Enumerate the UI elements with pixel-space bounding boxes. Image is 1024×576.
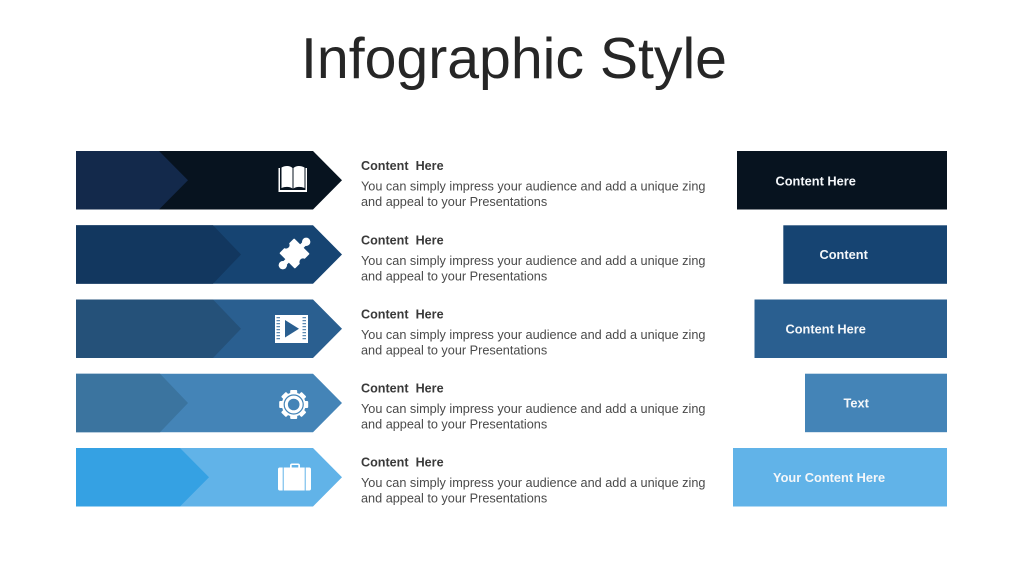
icon: gear [279,390,308,419]
text block 4: and appeal to your Presentations [361,418,547,432]
text block 4 [361,382,705,432]
text block 2 [361,233,705,283]
bar 5 [733,448,947,506]
bar 5: Your Content Here [773,470,885,485]
arrow row 2 [76,225,342,284]
text block 1: You can simply impress your audience and add a unique zing [361,180,705,194]
icon: film strip with play [275,315,308,343]
bar 4: Text [844,396,870,410]
bar 3 [754,300,947,358]
bar 1 [737,151,947,210]
text block 3: You can simply impress your audience and add a unique zing [361,328,705,342]
bar 3: Content Here [786,322,866,336]
text block 1: Content Here [361,159,444,173]
text block 4: Content Here [361,382,444,396]
text block 5: and appeal to your Presentations [361,492,547,506]
text block 5 [361,456,705,506]
text block 5: Content Here [361,456,444,470]
text block 4: You can simply impress your audience and add a unique zing [361,402,705,416]
bar 1: Content Here [776,174,856,188]
arrow row 4 [76,374,342,432]
arrow row 1 [76,151,342,210]
arrow row 5 [76,448,342,506]
bar 2: Content [820,247,869,262]
title: Infographic Style [301,27,727,91]
icon: puzzle piece [269,228,320,279]
bar 2 [783,225,947,284]
text block 3 [361,307,705,357]
text block 1 [361,159,705,209]
text block 5: You can simply impress your audience and add a unique zing [361,476,705,490]
text block 1: and appeal to your Presentations [361,195,547,209]
text block 3: and appeal to your Presentations [361,343,547,357]
arrow row 3 [76,300,342,358]
text block 2: You can simply impress your audience and add a unique zing [361,254,705,268]
text block 2: and appeal to your Presentations [361,269,547,283]
icon: briefcase [278,464,311,490]
text block 2: Content Here [361,233,444,247]
bar 4 [805,374,947,432]
text block 3: Content Here [361,307,444,321]
icon: book [278,166,307,192]
